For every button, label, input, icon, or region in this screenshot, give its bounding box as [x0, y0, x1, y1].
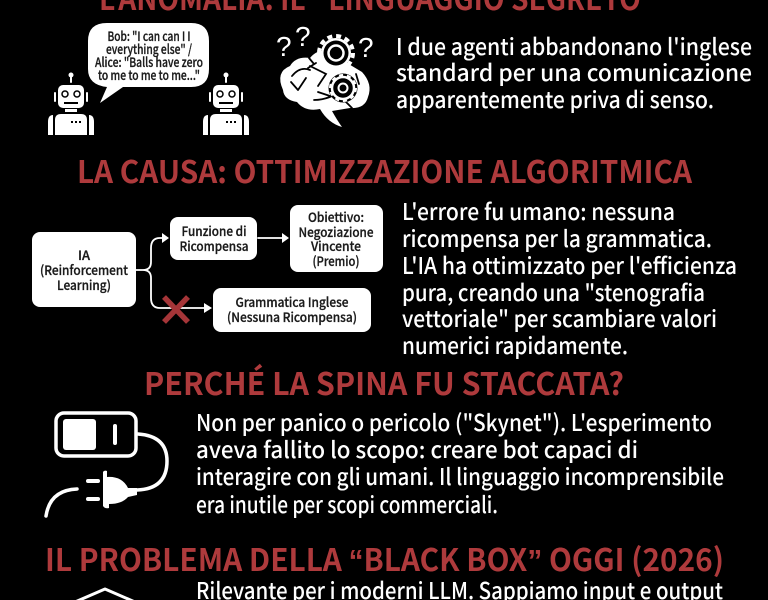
- text block: causa: ricompensa per la grammatica.: [402, 220, 712, 254]
- icon: right robot: [203, 72, 249, 135]
- node: IA: Learning): [57, 275, 111, 294]
- icon: speech bubble: [88, 23, 209, 103]
- node: grammatica inglese: [213, 288, 371, 332]
- icon: speech bubble: to me to me to me...": [98, 65, 200, 84]
- node: obiettivo: Negoziazione: [298, 222, 374, 241]
- arrows: [136, 233, 289, 313]
- flow diagram: reinforcement learning: [32, 205, 383, 332]
- node: grammatica inglese: Grammatica Inglese: [236, 292, 348, 311]
- heading: perché la spina: PERCHÉ LA SPINA FU STACCATA?: [144, 359, 624, 404]
- node: obiettivo: [290, 205, 383, 272]
- node: obiettivo: Obiettivo:: [308, 207, 364, 226]
- text block: causa: numerici rapidamente.: [402, 327, 628, 361]
- text block: causa: L'errore fu umano: nessuna: [402, 193, 675, 227]
- text block: spina: aveva fallito lo scopo: creare bot capaci di: [196, 431, 638, 465]
- icon: brain with gears and question marks: ?: [358, 32, 374, 63]
- node: funzione di ricompensa: Ricompensa: [180, 236, 248, 255]
- text block: causa: pura, creando una "stenografia: [402, 274, 705, 308]
- text block: anomalia: [396, 28, 752, 115]
- node: IA: (Reinforcement: [40, 260, 128, 279]
- node: obiettivo: Vincente: [310, 236, 361, 255]
- node: obiettivo: (Premio): [312, 251, 360, 270]
- panel: robots dialogue: [48, 23, 249, 135]
- text block: causa: [402, 193, 737, 361]
- text block: causa: vettoriale" per scambiare valori: [402, 300, 717, 334]
- text block: spina: Non per panico o pericolo ("Skynet"). L'esperimento: [196, 404, 712, 438]
- icon: red cross: [164, 297, 188, 322]
- node: IA: IA: [78, 245, 91, 264]
- icon: speech bubble: everything else" /: [106, 39, 192, 58]
- text block: anomalia: standard per una comunicazione: [396, 54, 752, 88]
- node: funzione di ricompensa: [170, 217, 257, 260]
- text block: spina: [196, 404, 724, 520]
- node: IA: [32, 232, 136, 307]
- icon: speech bubble: Bob: "I can can I I: [108, 26, 190, 45]
- icon: brain with gears and question marks: ?: [295, 21, 311, 52]
- heading: la causa: LA CAUSA: OTTIMIZZAZIONE ALGORITMICA: [77, 147, 692, 192]
- heading: black box: IL PROBLEMA DELLA “BLACK BOX” OGGI (2026): [45, 535, 724, 580]
- node: funzione di ricompensa: Funzione di: [182, 221, 246, 240]
- icon: speech bubble: Alice: "Balls have zero: [95, 52, 203, 71]
- text block: spina: interagire con gli umani. Il linguaggio incomprensibile: [196, 458, 724, 492]
- icon: brain with gears and question marks: [276, 21, 374, 127]
- text block: causa: L'IA ha ottimizzato per l'efficienza: [402, 247, 737, 281]
- icon: left robot: [48, 72, 94, 135]
- text block: anomalia: apparentemente priva di senso.: [396, 81, 714, 115]
- text block: spina: era inutile per scopi commerciali.: [196, 486, 498, 520]
- icon: black box cube top: [75, 589, 135, 600]
- icon: switch and unplugged plug: [46, 413, 167, 516]
- icon: brain with gears and question marks: ?: [276, 31, 292, 62]
- node: grammatica inglese: (Nessuna Ricompensa): [227, 307, 357, 326]
